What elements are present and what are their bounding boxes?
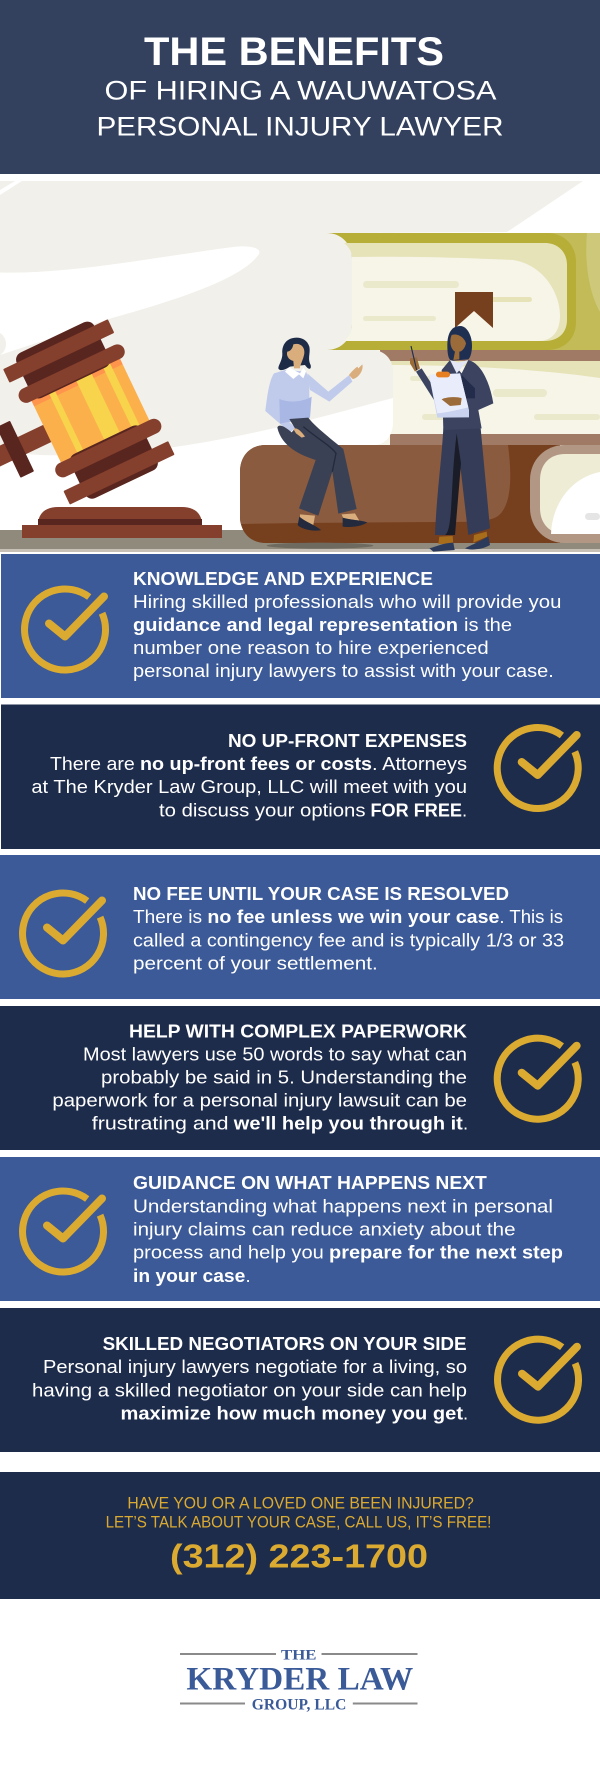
- ground: [0, 530, 600, 552]
- figure: standing lawyer with clipboard: [410, 326, 493, 552]
- text block: guidance and legal representation: [133, 614, 458, 635]
- text block: NO UP-FRONT EXPENSES: [228, 730, 467, 751]
- text block: having a skilled negotiator on your side can help: [32, 1380, 467, 1400]
- book: olive: [327, 233, 600, 350]
- text block: we'll help you through it: [233, 1112, 463, 1134]
- sound block: [22, 507, 222, 538]
- call to action text: HAVE YOU OR A LOVED ONE BEEN INJURED?: [127, 1495, 474, 1513]
- text block: number one reason to hire experienced: [133, 637, 489, 658]
- call to action text: LET’S TALK ABOUT YOUR CASE, CALL US, IT’S FREE!: [106, 1514, 491, 1532]
- text block: percent of your settlement.: [133, 952, 378, 974]
- text block: process and help you: [133, 1242, 324, 1262]
- text block: GUIDANCE ON WHAT HAPPENS NEXT: [133, 1172, 488, 1193]
- icon: check circle: [497, 727, 578, 808]
- text block: in your case: [133, 1265, 245, 1286]
- text block: probably be said in 5. Understanding the: [101, 1066, 467, 1088]
- text block: FOR FREE: [370, 800, 462, 820]
- title: THE BENEFITS: [144, 30, 444, 74]
- illustration: gavel, books and two lawyers: [0, 181, 600, 552]
- text block: no up-front fees or costs: [140, 753, 372, 774]
- book: pale pages: [300, 350, 600, 445]
- text block: no fee unless we win your case: [207, 906, 499, 927]
- icon: check circle: [497, 1038, 578, 1119]
- text block: Most lawyers use 50 words to say what can: [83, 1044, 467, 1064]
- text block: SKILLED NEGOTIATORS ON YOUR SIDE: [103, 1333, 467, 1354]
- book: brown: [240, 445, 560, 543]
- text block: [32, 1333, 468, 1424]
- text block: NO FEE UNTIL YOUR CASE IS RESOLVED: [133, 883, 509, 904]
- text block: injury claims can reduce anxiety about the: [133, 1218, 516, 1240]
- logo: The Kryder Law Group: [180, 1647, 418, 1713]
- text block: [133, 1172, 563, 1286]
- icon: check circle: [23, 893, 104, 974]
- text block: to discuss your options: [159, 800, 366, 820]
- call to action banner: [0, 1472, 600, 1599]
- gavel head: [0, 311, 178, 533]
- figure: seated lawyer: [265, 338, 373, 549]
- book: tan cover: [530, 445, 600, 543]
- text block: maximize how much money you get: [120, 1402, 463, 1424]
- title: PERSONAL INJURY LAWYER: [96, 112, 503, 142]
- text block: There is: [133, 906, 202, 927]
- text block: [133, 883, 564, 974]
- text block: paperwork for a personal injury lawsuit can be: [52, 1090, 467, 1110]
- text block: [52, 1020, 468, 1134]
- panel: knowledge and experience: [1, 554, 600, 698]
- icon: check circle: [25, 589, 106, 670]
- text block: [133, 568, 561, 681]
- header banner: [0, 0, 600, 174]
- text block: [31, 730, 467, 820]
- background shapes: [0, 181, 583, 455]
- logo: The Kryder Law Group: KRYDER LAW: [186, 1661, 413, 1697]
- text block: personal injury lawyers to assist with your case.: [133, 660, 554, 681]
- text block: frustrating and: [92, 1112, 228, 1134]
- icon: check circle: [23, 1191, 104, 1272]
- panel: no up-front expenses: [1, 704, 600, 849]
- logo: The Kryder Law Group: THE: [281, 1647, 316, 1663]
- text block: HELP WITH COMPLEX PAPERWORK: [129, 1020, 468, 1042]
- text block: .: [463, 1402, 468, 1424]
- text block: Personal injury lawyers negotiate for a living, so: [43, 1356, 467, 1377]
- text block: Understanding what happens next in personal: [133, 1196, 553, 1216]
- text block: .: [462, 800, 467, 820]
- text block: . Attorneys: [372, 753, 467, 774]
- icon: check circle: [498, 1339, 579, 1420]
- text block: There are: [50, 753, 135, 774]
- text block: KNOWLEDGE AND EXPERIENCE: [133, 568, 433, 589]
- title: [96, 30, 503, 142]
- text block: prepare for the next step: [329, 1242, 563, 1262]
- text block: .: [463, 1112, 468, 1134]
- text block: is the: [464, 614, 512, 635]
- text block: called a contingency fee and is typically 1/3 or 33: [133, 930, 564, 950]
- text block: .: [246, 1265, 251, 1286]
- text block: at The Kryder Law Group, LLC will meet with you: [31, 776, 467, 797]
- logo: The Kryder Law Group: GROUP, LLC: [252, 1696, 346, 1713]
- panel: guidance on what happens next: [0, 1157, 600, 1301]
- icon: bookmark: [455, 292, 493, 328]
- panel: skilled negotiators: [0, 1308, 600, 1452]
- text block: Hiring skilled professionals who will provide you: [133, 591, 561, 612]
- phone number: (312) 223-1700: [170, 1537, 428, 1574]
- title: OF HIRING A WAUWATOSA: [104, 76, 497, 106]
- call to action text: [106, 1495, 491, 1532]
- panel: help with complex paperwork: [0, 1006, 600, 1150]
- text block: . This is: [499, 906, 563, 927]
- icon: gavel: [0, 311, 222, 538]
- panel: no fee until resolved: [0, 855, 600, 999]
